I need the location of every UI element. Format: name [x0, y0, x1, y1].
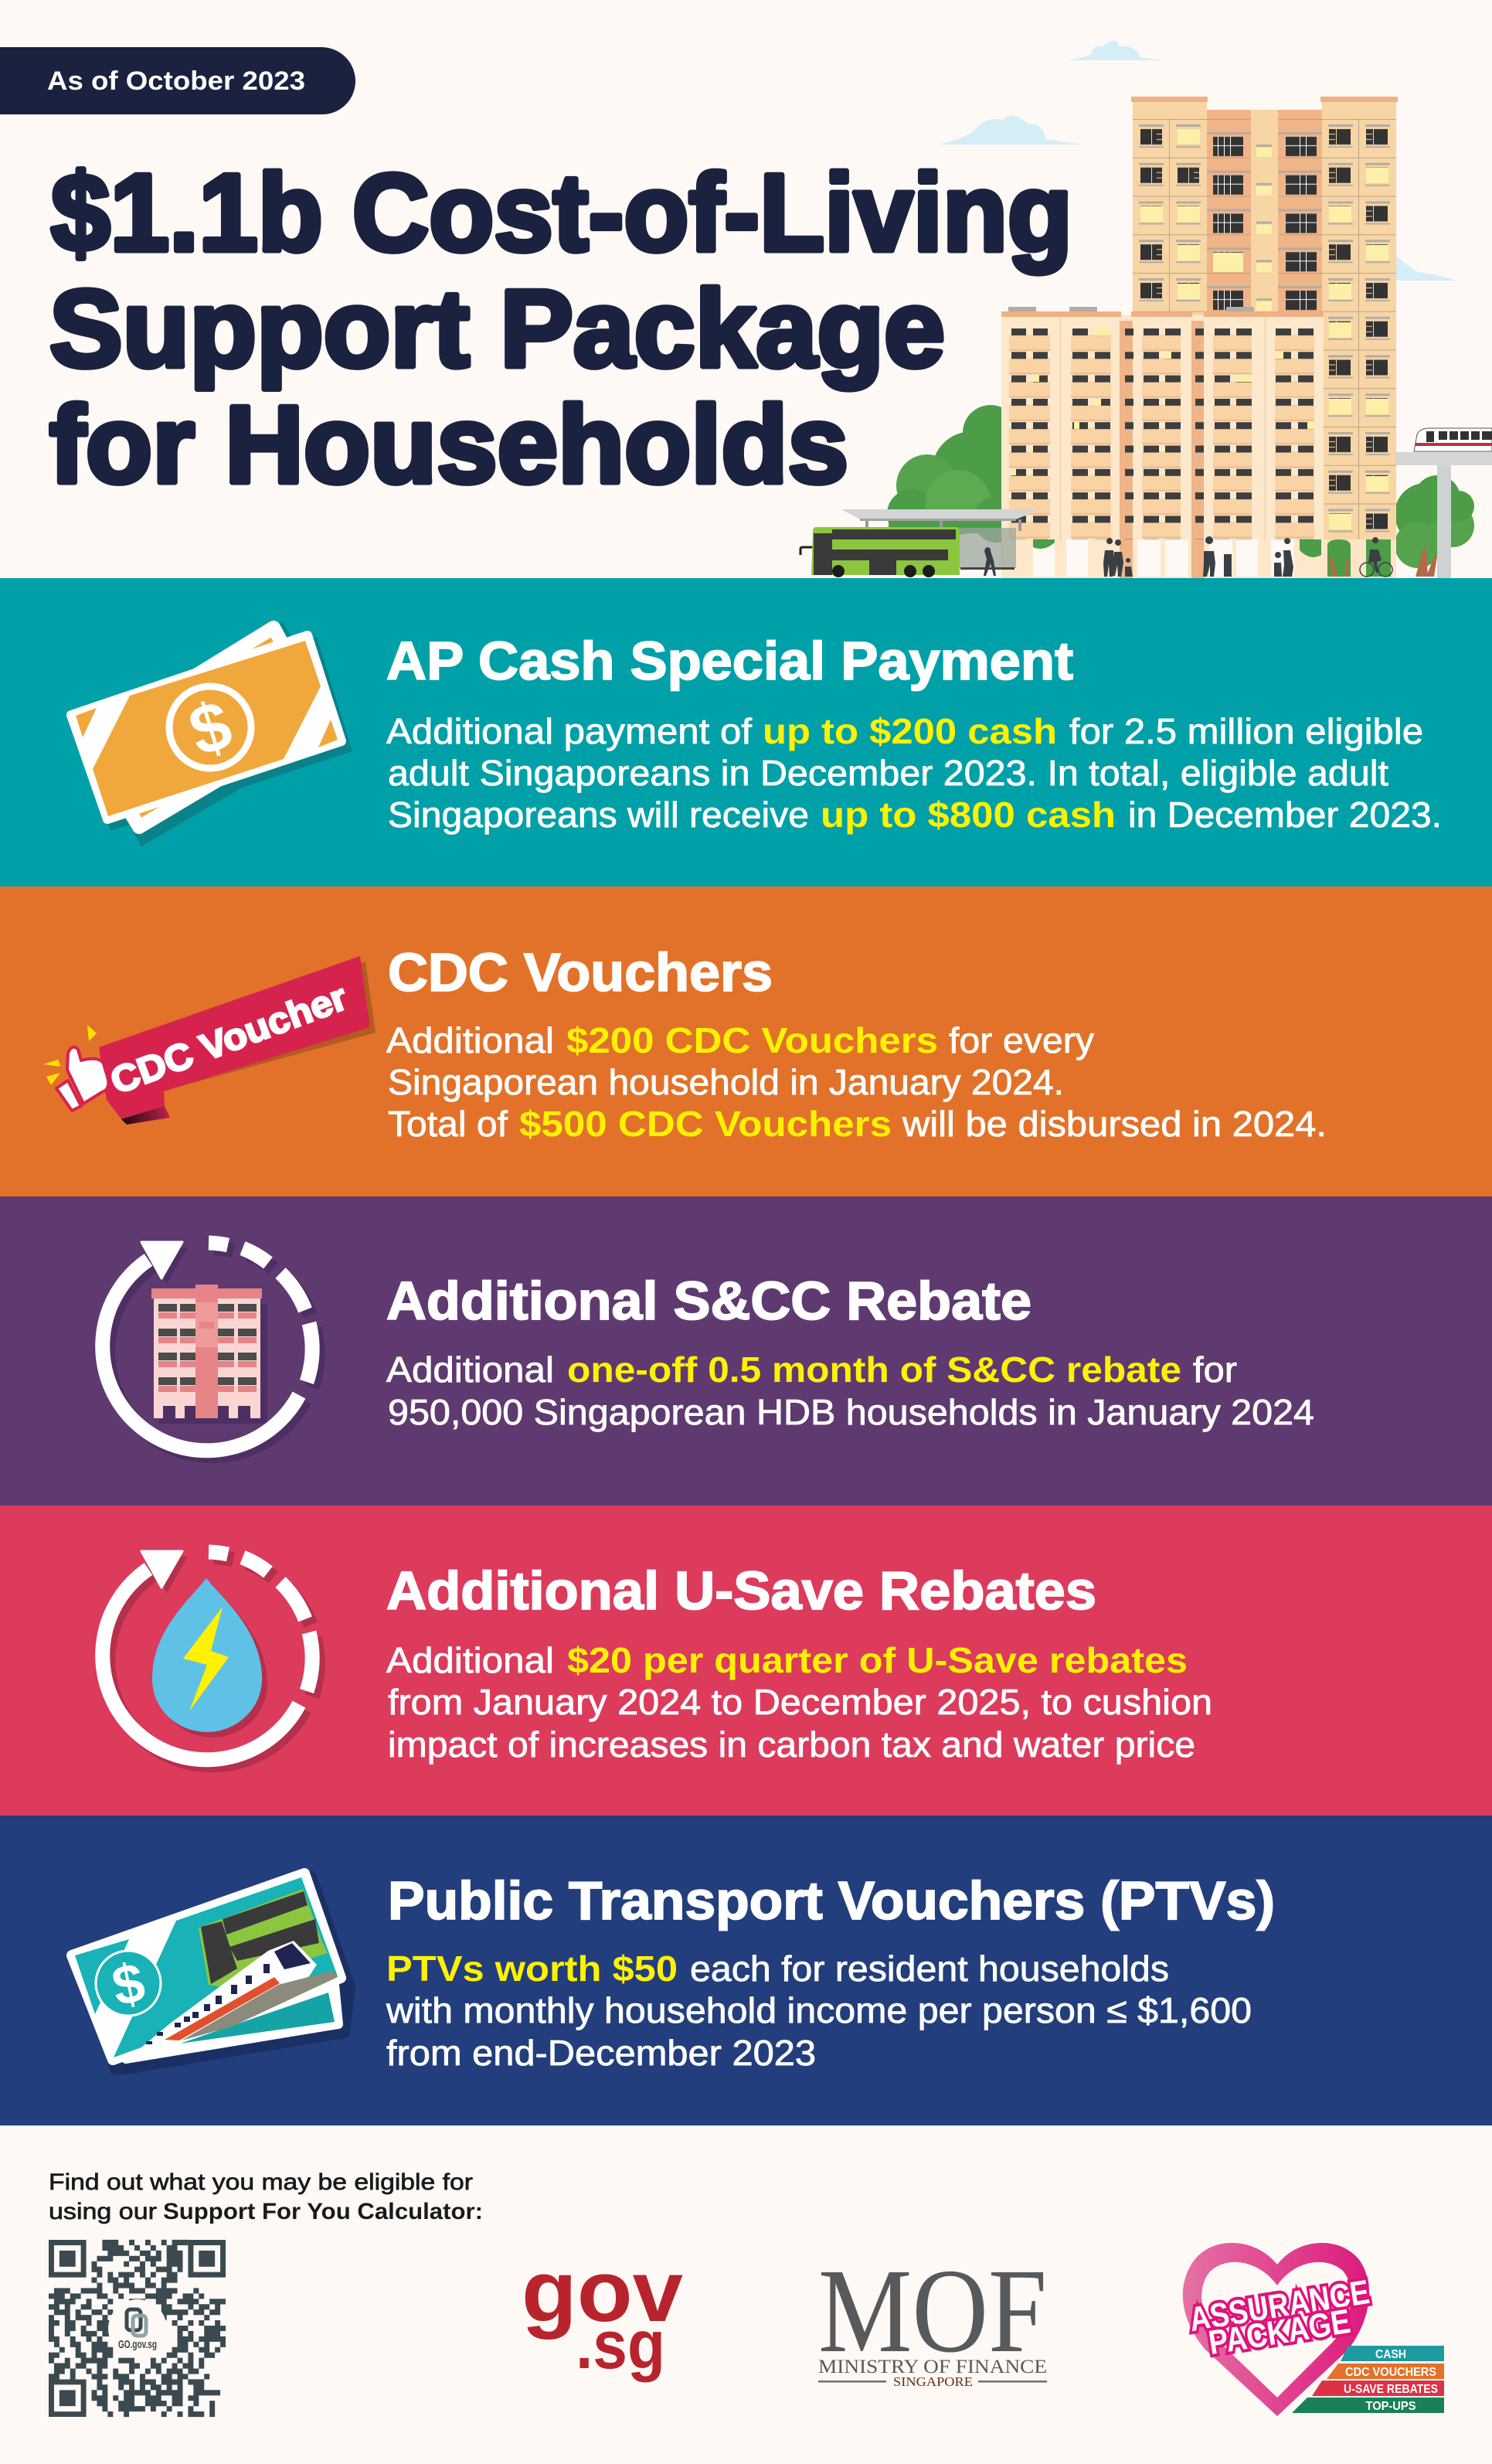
panel: CDC Vouchers — [0, 887, 1492, 1197]
body text: for every — [949, 1020, 1094, 1060]
body text: Additional — [386, 1640, 554, 1680]
logo: Assurance Package: U-SAVE REBATES — [1344, 2383, 1438, 2396]
logo: Assurance Package: PACKAGE — [1206, 2302, 1353, 2362]
body text: up to $200 cash — [763, 711, 1057, 751]
logo: Assurance Package: CDC VOUCHERS — [1345, 2366, 1436, 2379]
body text: up to $800 cash — [821, 795, 1116, 835]
body text: Additional payment of — [386, 711, 752, 751]
heading: Additional U-Save Rebates — [386, 1560, 1096, 1621]
logo: gov.sg: gov — [522, 2243, 683, 2340]
body text: one-off 0.5 month of S&CC rebate — [567, 1349, 1181, 1390]
body text: Additional — [386, 1020, 554, 1060]
logo: Ministry of Finance: SINGAPORE — [893, 2374, 973, 2389]
logo: gov.sg — [522, 2243, 683, 2383]
body text: Additional — [386, 1349, 554, 1390]
body text — [386, 711, 1442, 835]
icon: transport vouchers — [72, 1874, 350, 2070]
tower void deck — [1322, 539, 1396, 578]
icon: water and power drop in rebate cycle — [103, 1551, 318, 1765]
logo: Assurance Package: TOP-UPS — [1366, 2400, 1416, 2413]
body text: $200 CDC Vouchers — [566, 1020, 938, 1060]
heading: Public Transport Vouchers (PTVs) — [388, 1870, 1275, 1931]
icon: banknotes: $ — [181, 686, 240, 771]
body text: Singaporeans will receive — [388, 795, 809, 835]
body text: with monthly household income per person ≤ $1,600 — [386, 1990, 1252, 2030]
title — [49, 151, 1072, 506]
void deck openings — [1033, 539, 1294, 577]
body text: impact of increases in carbon tax and water price — [388, 1724, 1195, 1765]
bus shelter — [841, 509, 1040, 570]
body text: PTVs worth $50 — [386, 1948, 678, 1989]
logo: Assurance Package — [1183, 2243, 1444, 2416]
body text: adult Singaporeans in December 2023. In total, eligible adult — [388, 753, 1388, 793]
logo: Ministry of Finance: MINISTRY OF FINANCE — [818, 2357, 1047, 2377]
viaduct and train — [1395, 428, 1492, 578]
body text: in December 2023. — [1128, 795, 1442, 835]
body text — [386, 1349, 1314, 1432]
body text: 950,000 Singaporean HDB households in January 2024 — [388, 1392, 1314, 1432]
heading: Additional S&CC Rebate — [386, 1271, 1031, 1331]
logo: gov.sg: .sg — [576, 2306, 665, 2383]
body text: $500 CDC Vouchers — [519, 1104, 892, 1144]
clouds — [937, 40, 1456, 281]
panel: Public Transport Vouchers — [0, 1816, 1492, 2125]
footer: calculator prompt: using our — [49, 2199, 157, 2224]
panel: AP Cash Special Payment — [0, 578, 1492, 887]
title: $1.1b Cost-of-Living — [51, 151, 1072, 274]
heading: AP Cash Special Payment — [386, 631, 1073, 691]
QR code — [49, 2240, 226, 2417]
title: Support Package — [49, 267, 945, 390]
body text — [386, 1640, 1212, 1765]
panel: Additional S&CC Rebate — [0, 1196, 1492, 1506]
icon: banknotes — [71, 622, 352, 846]
people silhouettes — [984, 536, 1392, 577]
body text: will be disbursed in 2024. — [902, 1104, 1327, 1144]
tall tower — [1131, 97, 1398, 578]
panel: Additional U-Save Rebates — [0, 1506, 1492, 1816]
trees — [887, 405, 1474, 577]
body text: for 2.5 million eligible — [1069, 711, 1423, 751]
footer: calculator prompt: Find out what you may be eligible for — [49, 2170, 473, 2195]
heading: CDC Vouchers — [388, 942, 773, 1002]
body text: each for resident households — [690, 1948, 1169, 1989]
body text: from January 2024 to December 2025, to cushion — [388, 1682, 1212, 1722]
body text: Singaporean household in January 2024. — [388, 1062, 1064, 1102]
body text: from end-December 2023 — [386, 2033, 816, 2073]
bus — [800, 527, 960, 577]
body text — [386, 1948, 1252, 2073]
icon: transport vouchers: $ — [107, 1952, 150, 2018]
logo: Assurance Package: ASSURANCE — [1187, 2273, 1372, 2339]
date pill: As of October 2023 — [47, 66, 305, 96]
illustration: HDB skyline with bus and train — [800, 40, 1492, 578]
footer: calculator prompt — [49, 2170, 483, 2224]
logo: Ministry of Finance: MOF — [818, 2244, 1047, 2377]
date pill — [0, 47, 355, 114]
logo: Assurance Package: CASH — [1375, 2348, 1406, 2361]
icon: HDB block in rebate cycle — [103, 1242, 318, 1456]
QR code: GO.gov.sg — [118, 2338, 157, 2351]
icon: CDC voucher banner — [43, 956, 376, 1125]
icon: CDC voucher banner: CDC Voucher — [105, 977, 352, 1102]
body text: Total of — [388, 1104, 508, 1144]
body text: for — [1193, 1349, 1237, 1390]
low block — [1001, 307, 1324, 578]
title: for Households — [49, 383, 848, 506]
footer: calculator prompt: Support For You Calculator: — [163, 2199, 483, 2224]
body text — [386, 1020, 1327, 1144]
body text: $20 per quarter of U-Save rebates — [567, 1640, 1188, 1680]
